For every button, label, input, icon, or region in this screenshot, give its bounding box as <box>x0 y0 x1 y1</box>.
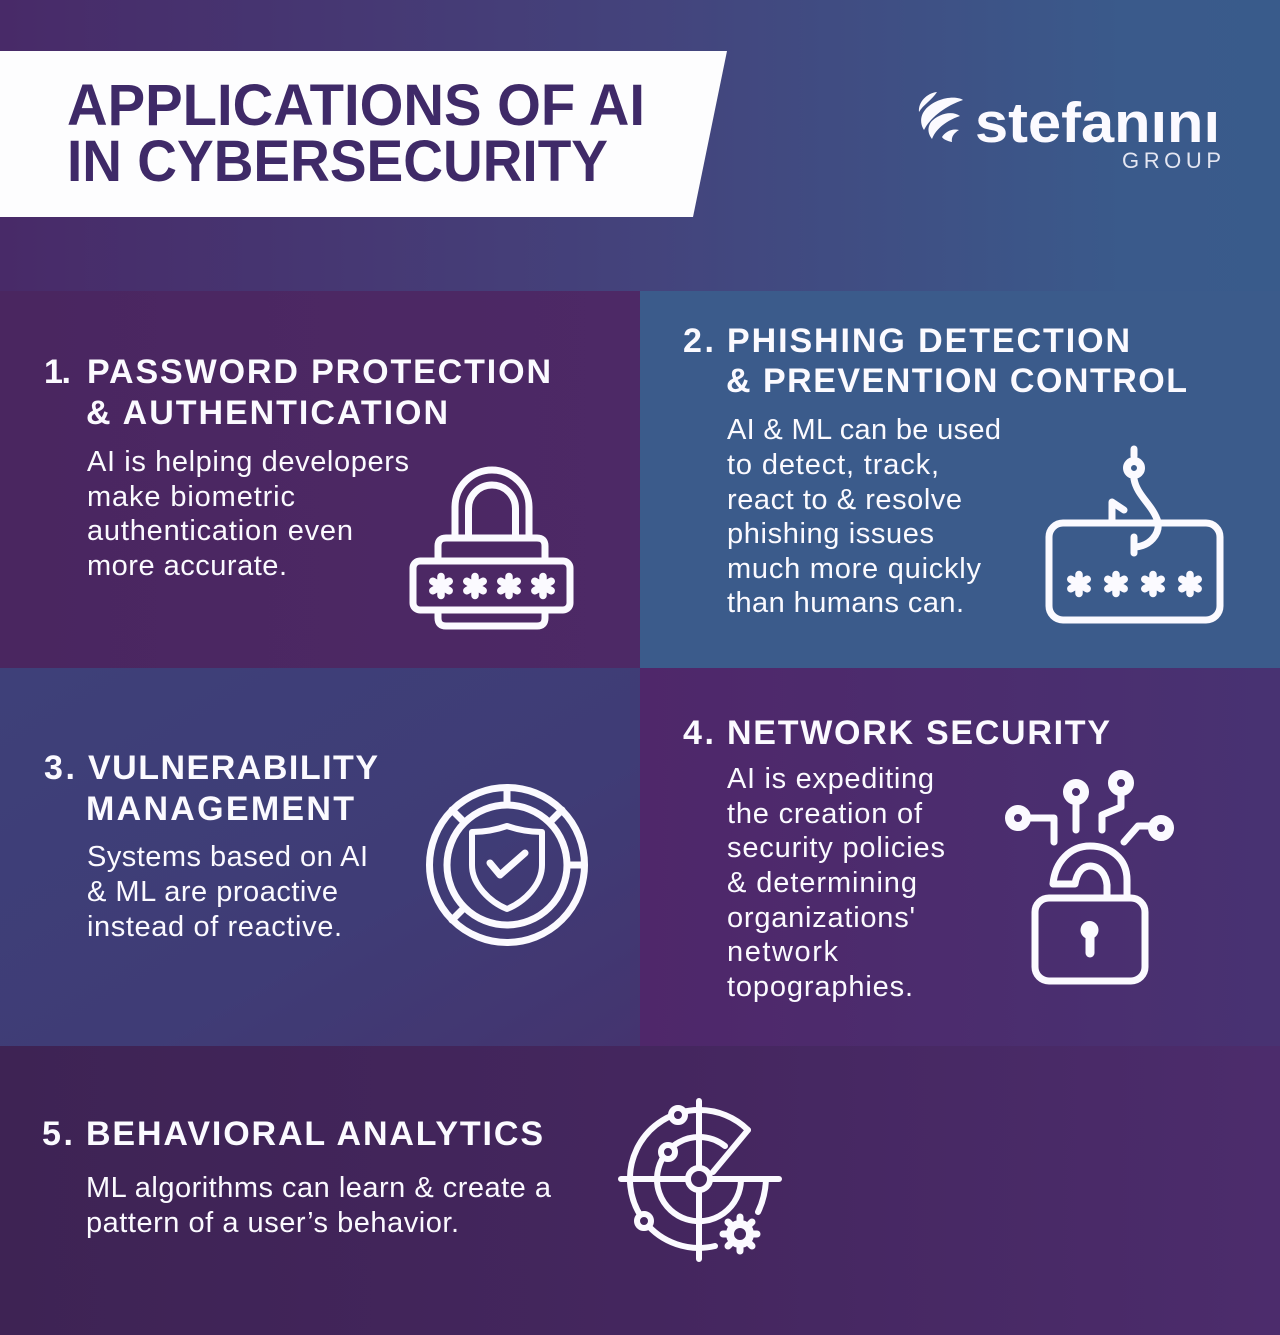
icon: radar with gear <box>621 1101 779 1259</box>
text: phishing detection: phishing issues <box>727 518 934 550</box>
panel: behavioral analytics <box>0 1046 1280 1335</box>
text: phishing detection: AI & ML can be used <box>727 414 1001 446</box>
icon: fishing hook and password <box>1049 449 1220 620</box>
icon: open lock with circuit lines <box>1010 774 1170 981</box>
text: password protection: make biometric <box>87 481 295 513</box>
heading: vulnerability management: VULNERABILITY <box>88 749 378 787</box>
title <box>67 73 645 194</box>
panel: network security <box>640 668 1280 1046</box>
heading: behavioral analytics: 5. <box>42 1115 73 1153</box>
text: network security: network <box>727 936 838 968</box>
text: password protection: more accurate. <box>87 550 287 582</box>
logo wordmark: stefanını <box>975 91 1220 155</box>
text: vulnerability management <box>87 841 368 943</box>
text: network security: security policies <box>727 832 945 864</box>
title banner <box>0 51 727 217</box>
text: vulnerability management: Systems based on AI <box>87 841 368 873</box>
panel: vulnerability management <box>0 668 640 1046</box>
heading: network security: 4. <box>683 714 714 752</box>
heading: phishing detection: 2. <box>683 322 714 360</box>
heading: password protection: 1. <box>44 353 71 391</box>
title: IN CYBERSECURITY <box>67 129 608 194</box>
heading: password protection <box>44 353 551 432</box>
text: network security: organizations' <box>727 902 915 934</box>
text: behavioral analytics <box>86 1172 552 1239</box>
text: vulnerability management: & ML are proactive <box>87 876 338 908</box>
text: network security: AI is expediting <box>727 763 934 795</box>
text: behavioral analytics: pattern of a user’s behavior. <box>86 1207 459 1239</box>
logo subtitle: GROUP <box>1122 148 1221 173</box>
heading: network security: NETWORK SECURITY <box>727 714 1110 752</box>
text: behavioral analytics: ML algorithms can learn & create a <box>86 1172 552 1204</box>
icon: logo globe <box>919 92 963 142</box>
heading: phishing detection: PHISHING DETECTION <box>727 322 1130 360</box>
text: network security <box>727 763 945 1003</box>
panel: phishing detection <box>640 291 1280 668</box>
heading: password protection: PASSWORD PROTECTION <box>87 353 551 391</box>
title: APPLICATIONS OF AI <box>67 73 645 138</box>
text: phishing detection: than humans can. <box>727 587 964 619</box>
heading: phishing detection: & PREVENTION CONTROL <box>726 362 1187 400</box>
heading: password protection: & AUTHENTICATION <box>86 394 448 432</box>
text: phishing detection <box>727 414 1001 619</box>
text: vulnerability management: instead of reactive. <box>87 911 342 943</box>
text: password protection: authentication even <box>87 515 353 547</box>
text: phishing detection: much more quickly <box>727 553 982 585</box>
text: network security: topographies. <box>727 971 913 1003</box>
panel: password protection <box>0 291 640 668</box>
icon: shield in target rings <box>430 788 584 942</box>
heading: phishing detection <box>683 322 1187 400</box>
text: network security: & determining <box>727 867 917 899</box>
heading: vulnerability management: 3. <box>44 749 75 787</box>
icon: padlock with password <box>413 470 570 626</box>
heading: vulnerability management <box>44 749 378 828</box>
text: password protection: AI is helping developers <box>87 446 409 478</box>
heading: behavioral analytics: BEHAVIORAL ANALYTICS <box>86 1115 543 1153</box>
heading: vulnerability management: MANAGEMENT <box>86 790 354 828</box>
text: password protection <box>87 446 409 582</box>
text: network security: the creation of <box>727 798 923 830</box>
logo: stefanini group <box>919 91 1221 173</box>
text: phishing detection: react to & resolve <box>727 484 962 516</box>
text: phishing detection: to detect, track, <box>727 449 939 481</box>
